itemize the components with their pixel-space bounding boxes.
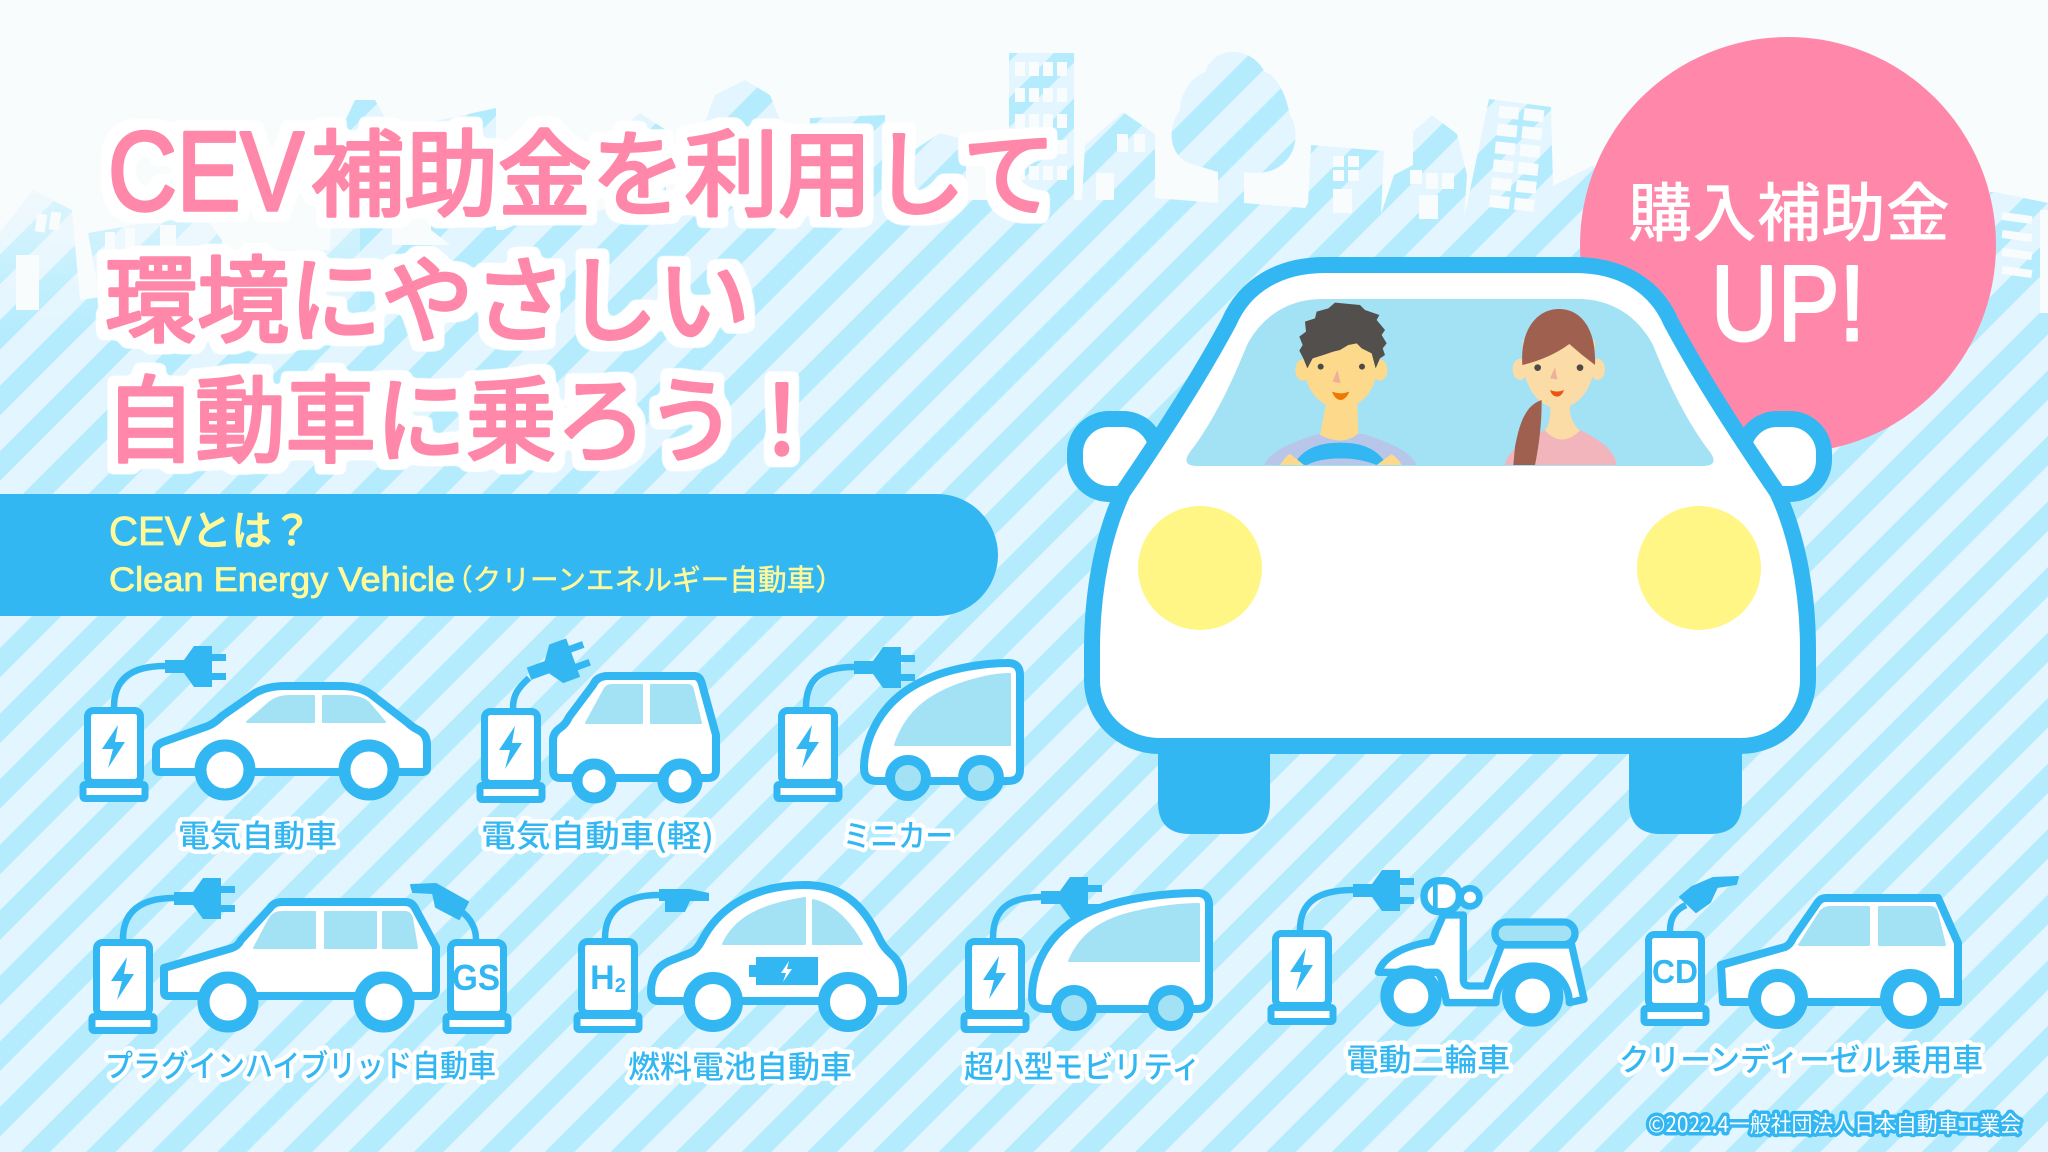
banner: what is CEV: Clean Energy Vehicle [109, 561, 455, 599]
banner: what is CEV: （クリーンエネルギー自動車） [444, 557, 844, 599]
label: mini car: ミニカー [843, 811, 953, 856]
headlights [1138, 506, 1761, 630]
mirrors [1075, 419, 1824, 494]
title: 環境にやさしい [105, 249, 750, 354]
icon: fuel cell vehicle: 2 [615, 975, 626, 997]
windshield [1186, 299, 1714, 466]
icon: electric vehicle [83, 646, 427, 798]
icon: ultra-compact mobility [964, 877, 1209, 1030]
label: fuel cell vehicle: 燃料電池自動車 [628, 1042, 852, 1087]
icon: plug-in hybrid: GS [452, 957, 500, 998]
passenger [1505, 309, 1617, 465]
icon: electric motorcycle [1271, 870, 1584, 1022]
title [105, 109, 1056, 474]
wheels [1158, 735, 1742, 834]
icon: clean diesel car [1644, 877, 1958, 1022]
label: electric vehicle: 電気自動車 [178, 811, 337, 856]
icon: electric kei car [480, 634, 716, 800]
driver [1264, 303, 1417, 465]
badge: purchase subsidy up [1580, 37, 1996, 453]
city skyline silhouette [0, 0, 2048, 330]
title: 自動車に乗ろう！ [105, 369, 827, 474]
label: ultra-compact mobility: 超小型モビリティ [964, 1042, 1201, 1087]
icon: fuel cell vehicle: H [590, 959, 615, 997]
badge: purchase subsidy up: 購入補助金 [1628, 178, 1950, 250]
icon: clean diesel car: CD [1652, 953, 1698, 990]
label: plug-in hybrid: プラグインハイブリッド自動車 [105, 1041, 496, 1086]
title: 補助金を利用して [311, 123, 1056, 228]
car body [1092, 265, 1808, 746]
icon: plug-in hybrid [92, 878, 508, 1030]
label: clean diesel car: クリーンディーゼル乗用車 [1619, 1035, 1983, 1080]
label: electric kei car: 電気自動車(軽) [481, 811, 714, 856]
badge: purchase subsidy up: UP! [1711, 243, 1865, 363]
main car illustration [1075, 265, 1824, 834]
icon: fuel cell vehicle [577, 885, 903, 1030]
label: electric motorcycle: 電動二輪車 [1346, 1035, 1510, 1080]
copyright: ©2022.4一般社団法人日本自動車工業会 [1648, 1107, 2021, 1139]
banner: what is CEV: CEVとは？ [109, 508, 312, 554]
banner: what is CEV [0, 494, 998, 616]
title: CEV [108, 109, 304, 234]
icon: mini car [777, 647, 1020, 798]
